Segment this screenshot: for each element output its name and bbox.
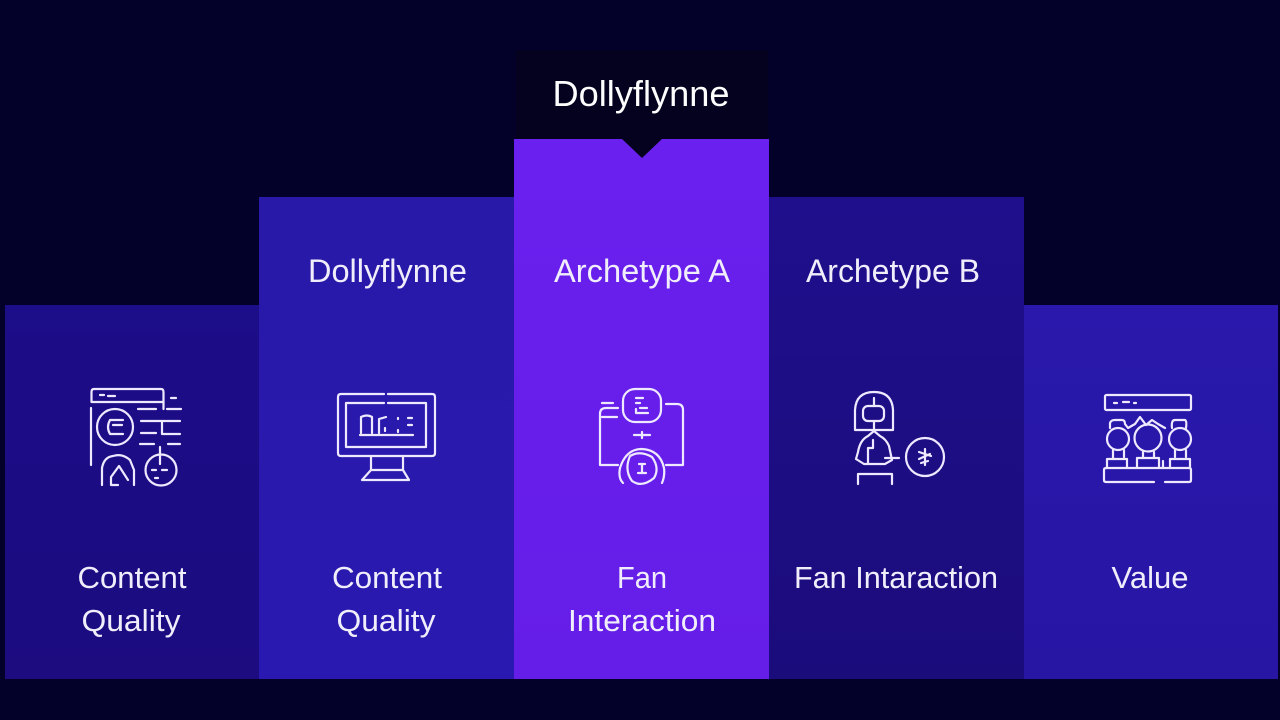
heading: Dollyflynne: Dollyflynne [308, 253, 467, 289]
label: fan interaction second: Fan Intaraction [794, 560, 998, 595]
heading: Archetype B: Archetype B [806, 253, 980, 289]
icon: desktop monitor [338, 394, 435, 480]
label: content quality second: Content [332, 560, 442, 595]
icon: fan interaction loop [600, 389, 683, 484]
label: fan interaction: Interaction [568, 603, 716, 638]
panel: Archetype B column [769, 197, 1024, 679]
label: content quality second [332, 560, 442, 638]
panel: Archetype A column [514, 139, 769, 679]
panel: value [1024, 305, 1278, 679]
panel: Dollyflynne column [259, 197, 514, 679]
label: fan interaction [568, 560, 716, 638]
icon: content dashboard [91, 389, 181, 486]
label: content quality second: Quality [336, 603, 436, 638]
icon: audience group [1104, 395, 1191, 482]
label: value: Value [1112, 560, 1188, 595]
heading: Dollyflynne title: Dollyflynne [552, 73, 730, 114]
label: fan interaction: Fan [617, 560, 667, 595]
heading: Archetype A: Archetype A [554, 253, 731, 289]
label: content quality left: Content [78, 560, 187, 595]
panel: content quality left [5, 305, 259, 679]
icon: person with badge [855, 392, 944, 484]
label: content quality left: Quality [82, 603, 181, 638]
label: content quality left [78, 560, 187, 638]
callout: top title banner [516, 50, 768, 158]
